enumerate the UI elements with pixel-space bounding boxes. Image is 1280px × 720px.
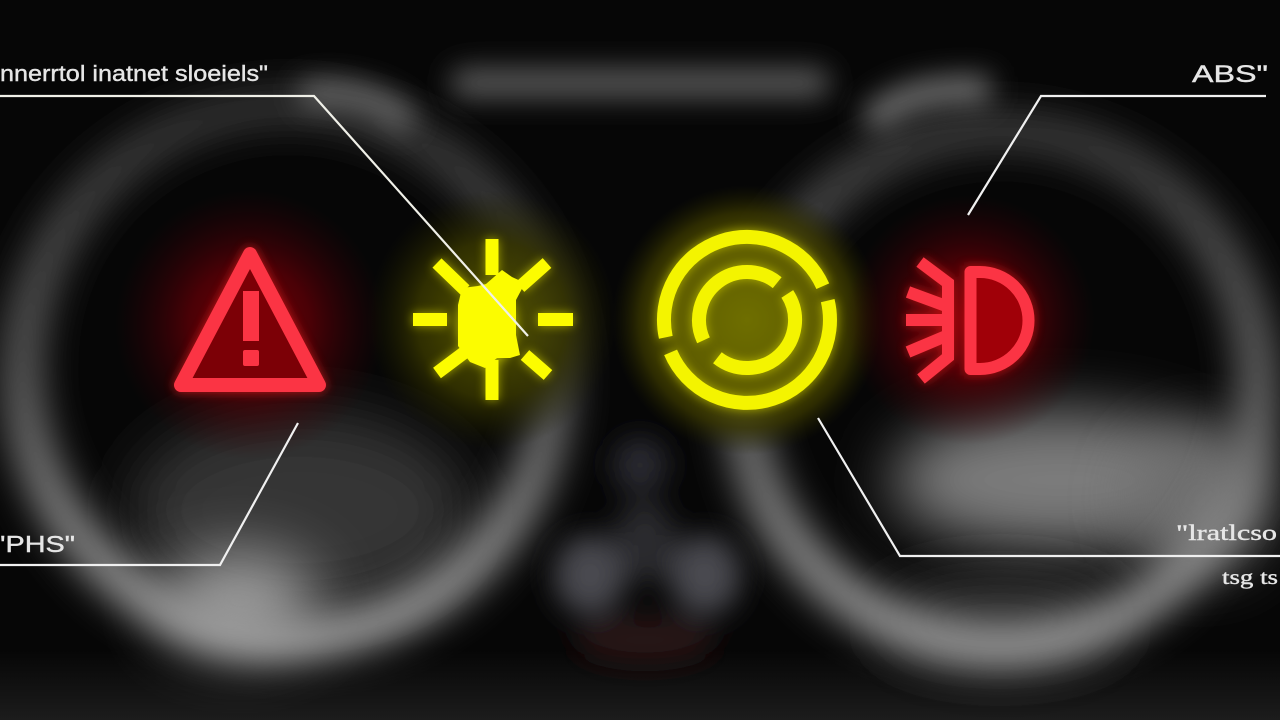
- icon: headlight lamp: [906, 262, 1028, 379]
- icon: warning triangle: [181, 254, 319, 385]
- bottom centre cluster: [554, 437, 741, 662]
- label: bottom right upper: "lratlcso: [1176, 520, 1277, 545]
- glow: headlight: [845, 195, 1095, 445]
- glow: sun lamp: [367, 190, 617, 450]
- glow: warning triangle: [115, 190, 385, 460]
- callout line: bottom left: [0, 423, 298, 565]
- glow: ring lamp: [612, 185, 882, 455]
- top centre bar: [450, 68, 830, 98]
- label: PHS: 'PHS": [0, 531, 75, 557]
- icon: yellow ring lamp: [664, 237, 830, 403]
- callout line: top left: [0, 96, 528, 336]
- label: ABS: ABS": [1192, 61, 1268, 88]
- callout line: bottom right: [818, 418, 1280, 556]
- icon: yellow sun lamp: [413, 239, 573, 400]
- left gauge: [22, 93, 554, 650]
- right gauge: [742, 89, 1270, 660]
- callout line: top right: [968, 96, 1266, 215]
- label: bottom right lower: tsg ts: [1222, 567, 1278, 589]
- label: top left: nnerrtol inatnet sloeiels": [0, 61, 268, 86]
